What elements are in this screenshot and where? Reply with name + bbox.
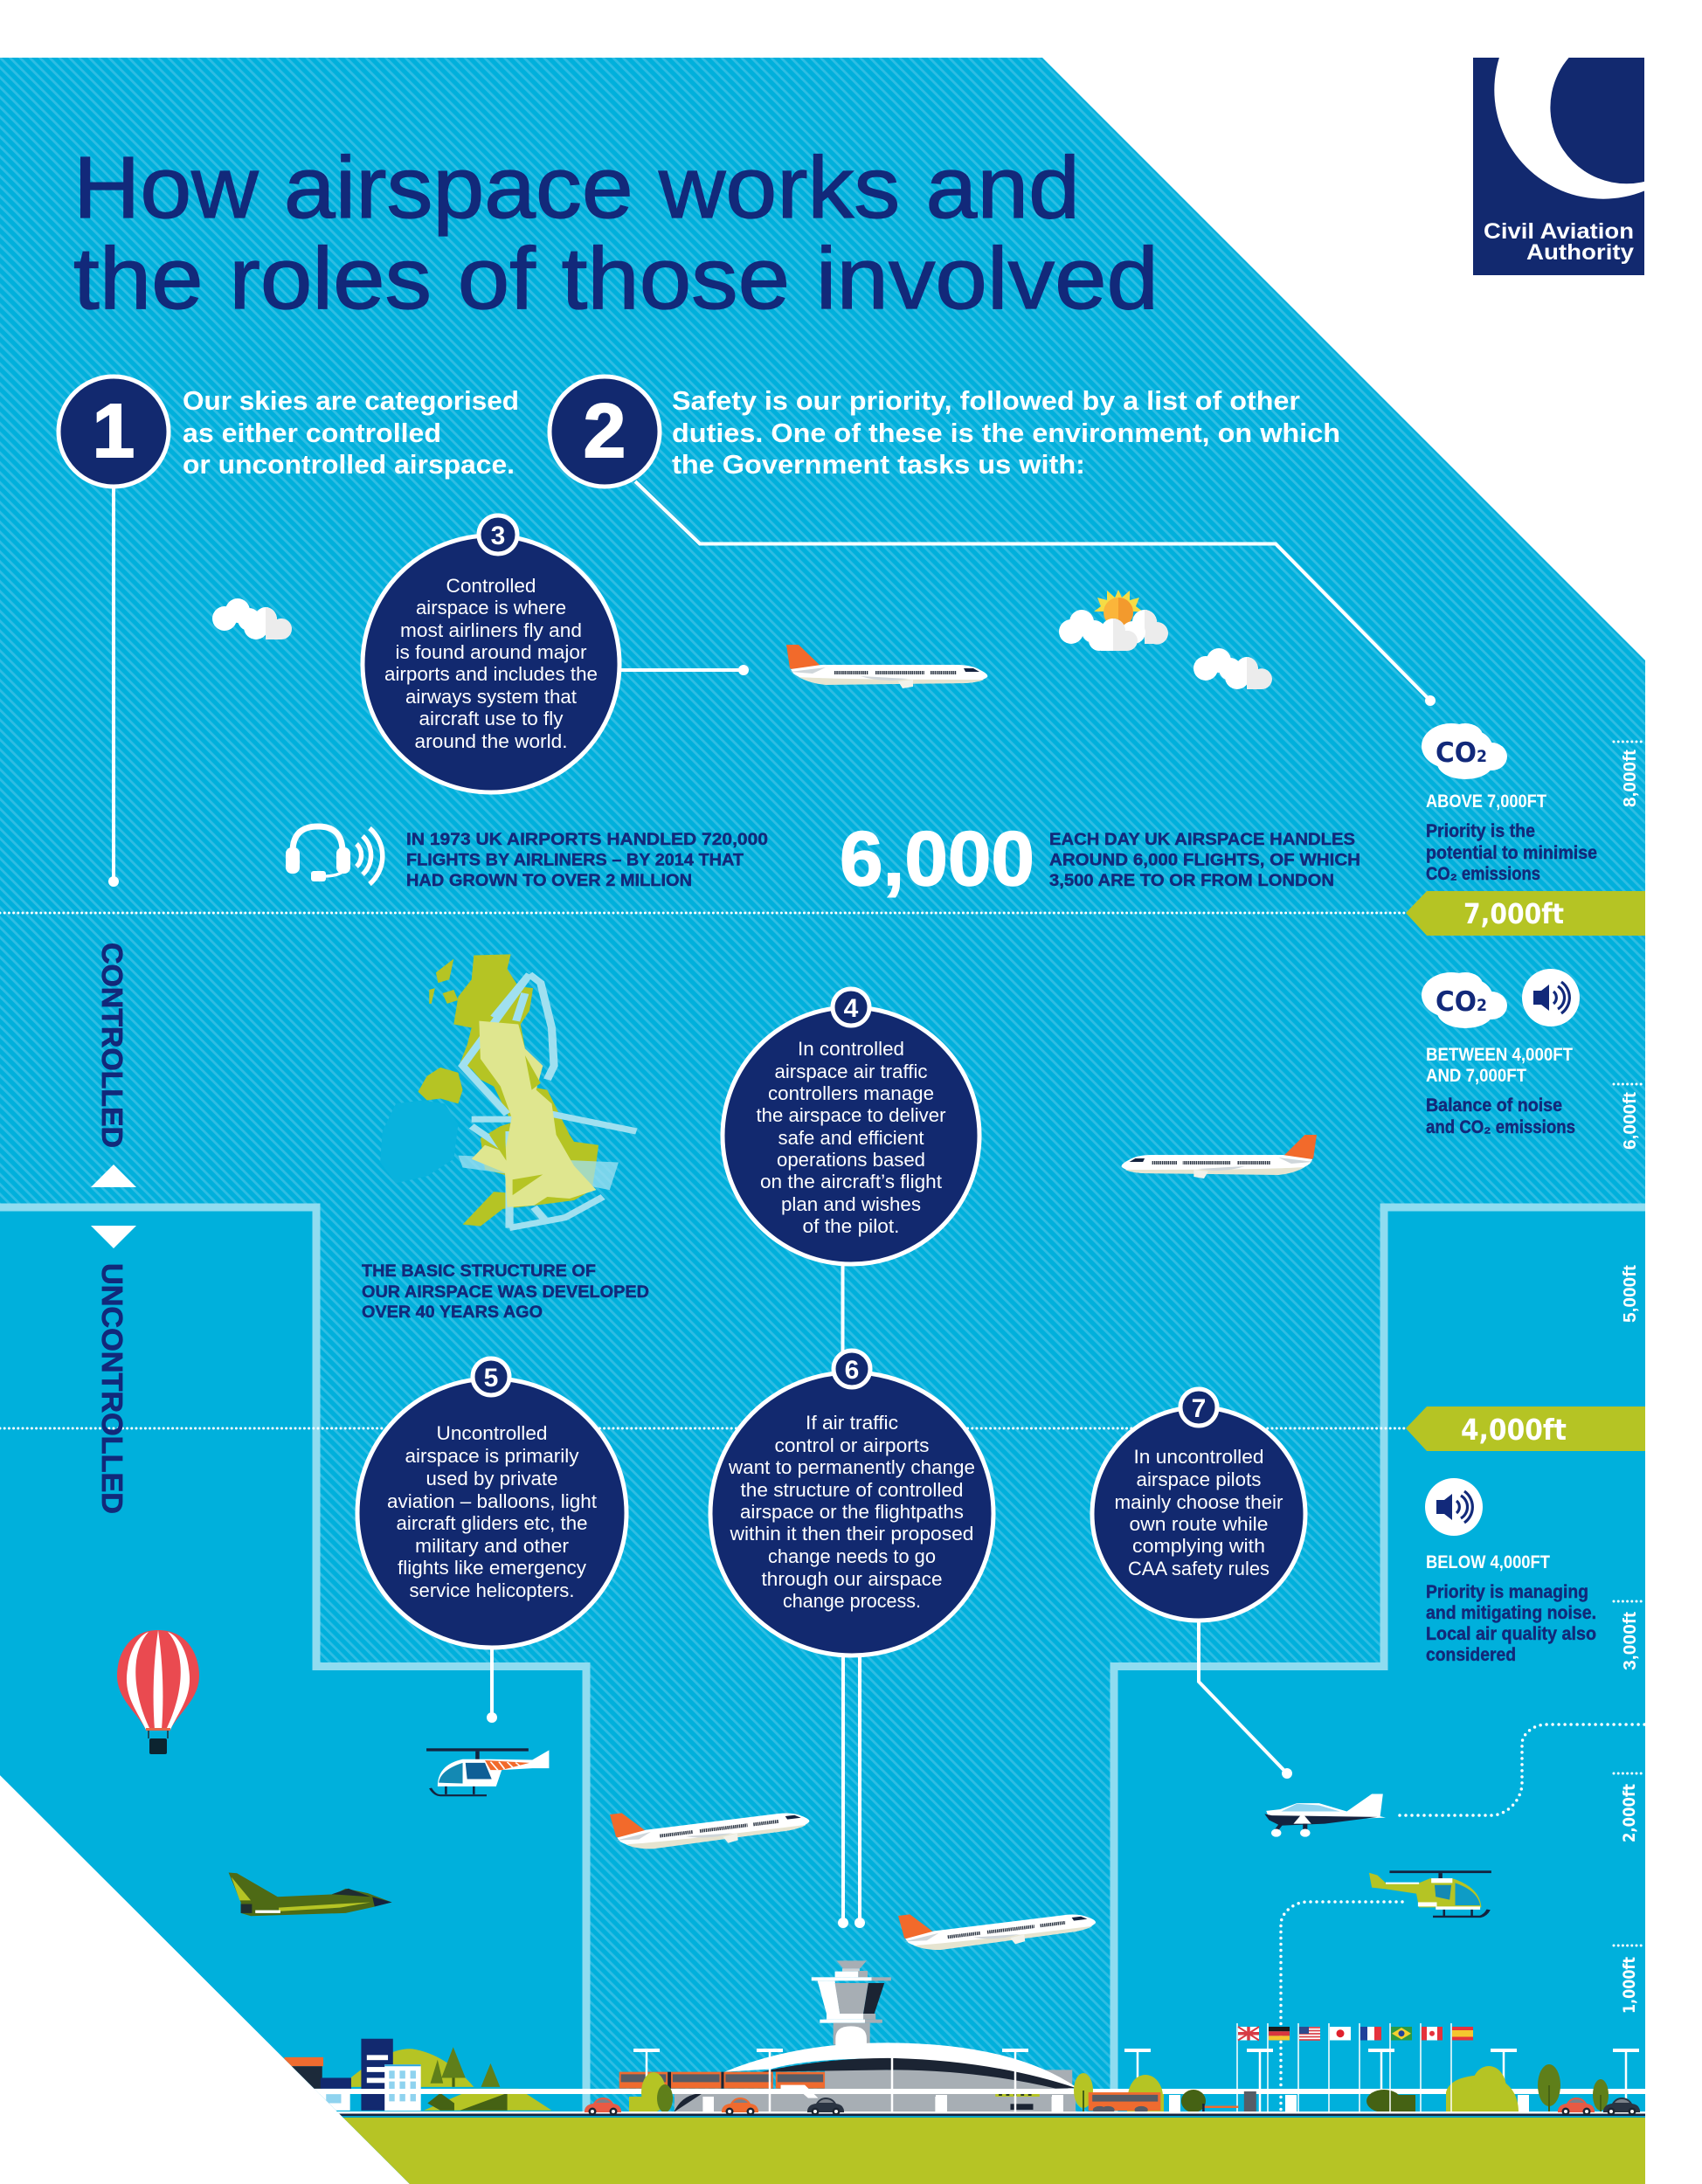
circle 7: pilots in uncontrolled airspace [1092, 1389, 1305, 1621]
altitude marker: 4,000ft [1406, 1406, 1645, 1451]
text: between 4,000ft and 7,000ft: and CO₂ emissions [1426, 1117, 1575, 1137]
connector: circle 4 to circle 6 [841, 1265, 844, 1354]
scene: flags [1237, 2023, 1473, 2112]
circle 6: airspace change process: control or airports [774, 1434, 930, 1456]
circle 7: pilots in uncontrolled airspace: complying with [1132, 1535, 1265, 1557]
circle 5: uncontrolled airspace: military and other [415, 1535, 569, 1557]
text: basic structure of airspace: OVER 40 YEARS AGO [362, 1303, 543, 1322]
airliner climbing, right [898, 1892, 1097, 1958]
text: above 7,000ft: CO₂ emissions [1426, 864, 1540, 884]
connector: circle 2 to CO2 priorities [635, 481, 1436, 706]
circle 3: controlled airspace: most airliners fly and [400, 619, 582, 641]
circle 3: controlled airspace [363, 515, 619, 792]
icon: CO2 cloud above 7,000ft: 2 [1477, 747, 1487, 766]
controlled label: CONTROLLED [96, 943, 128, 1148]
circle 5: uncontrolled airspace: 5 [484, 1364, 498, 1393]
circle 4: air traffic controllers: on the aircraft’s flight [760, 1171, 942, 1192]
circle 5: uncontrolled airspace: aviation – balloons, light [387, 1490, 597, 1512]
icon: CO2 cloud between altitudes [1422, 972, 1507, 1028]
scene: cars [585, 2098, 1640, 2116]
text: below 4,000ft: BELOW 4,000FT [1426, 1552, 1550, 1572]
step 1 text: Our skies are categorised [183, 385, 519, 416]
text: below 4,000ft: and mitigating noise. [1426, 1603, 1596, 1623]
scene: airport tower [812, 1960, 891, 2046]
altitude scale labels: 8,000ft [1621, 750, 1640, 807]
circle 5: uncontrolled airspace: service helicopters. [409, 1579, 575, 1601]
icon: speaker between altitudes [1522, 969, 1580, 1026]
circle 5: uncontrolled airspace: flights like emergency [398, 1557, 586, 1579]
text: basic structure of airspace: THE BASIC STRUCTURE OF [362, 1261, 596, 1281]
step 1 text [183, 385, 519, 480]
scene: trees and bushes [629, 2064, 1609, 2118]
altitude scale labels: 1,000ft [1620, 1957, 1639, 2014]
altitude scale labels: 2,000ft [1620, 1784, 1639, 1842]
stat: daily flights [1049, 830, 1360, 890]
text: between 4,000ft and 7,000ft: Balance of noise [1426, 1095, 1562, 1116]
circle 6: airspace change process: within it then their proposed [729, 1523, 973, 1545]
step 2 text: the Government tasks us with: [672, 449, 1085, 480]
altitude scale labels [1620, 750, 1640, 2014]
stat: daily flights: EACH DAY UK AIRSPACE HANDLES [1049, 830, 1355, 849]
scene: airport terminal and train [619, 2042, 1077, 2111]
airliner, cruising right [786, 645, 987, 688]
big number 6,000: 6,000 [840, 815, 1034, 902]
circle 6: airspace change process: want to permanently change [728, 1456, 975, 1478]
circle 6: airspace change process: If air traffic [806, 1412, 898, 1434]
stat: daily flights: 3,500 ARE TO OR FROM LONDON [1049, 871, 1334, 890]
icon: CO2 cloud above 7,000ft: CO [1436, 737, 1477, 769]
title [73, 139, 1159, 328]
circle 4: air traffic controllers: of the pilot. [802, 1215, 900, 1237]
text: between 4,000ft and 7,000ft [1426, 1045, 1575, 1137]
circle 3: controlled airspace: around the world. [414, 730, 568, 752]
circle 4: air traffic controllers: controllers manage [768, 1082, 934, 1104]
altitude marker: 7,000ft: 7,000ft [1463, 897, 1564, 930]
circle 3: controlled airspace: is found around major [395, 641, 587, 663]
circle 4: air traffic controllers: safe and efficient [778, 1127, 924, 1149]
step 2 text: Safety is our priority, followed by a list of other [672, 385, 1300, 416]
circle 6: airspace change process: airspace or the flightpaths [740, 1501, 964, 1523]
circle 5: uncontrolled airspace: airspace is primarily [405, 1445, 578, 1467]
stat: airport flights 1973 to 2014: HAD GROWN TO OVER 2 MILLION [406, 871, 692, 890]
circle 4: air traffic controllers [723, 989, 979, 1264]
title: How airspace works and [73, 139, 1080, 237]
light aircraft [1264, 1794, 1386, 1837]
stat: daily flights: AROUND 6,000 FLIGHTS, OF WHICH [1049, 851, 1360, 870]
circle 6: airspace change process: through our airspace [762, 1568, 942, 1590]
text: above 7,000ft [1426, 791, 1597, 884]
scene: bus and barrier [1089, 2091, 1256, 2113]
title: the roles of those involved [73, 230, 1159, 328]
stat: airport flights 1973 to 2014: IN 1973 UK AIRPORTS HANDLED 720,000 [406, 830, 768, 849]
scene: town at left [284, 2039, 552, 2111]
circle 7: pilots in uncontrolled airspace: 7 [1192, 1394, 1206, 1423]
arrow: down to uncontrolled [91, 1226, 136, 1248]
circle 3: controlled airspace: 3 [491, 522, 505, 550]
ground [332, 2111, 1645, 2184]
altitude scale labels: 5,000ft [1621, 1265, 1640, 1323]
connector: circle 6 to airliners [838, 1657, 865, 1928]
circle 6: airspace change process: change needs to go [768, 1545, 936, 1567]
circle 4: air traffic controllers: the airspace to deliver [757, 1104, 945, 1126]
helicopter: green [1369, 1870, 1491, 1917]
icon: headset [286, 826, 383, 884]
circle 6: airspace change process: change process. [783, 1590, 921, 1612]
circle 5: uncontrolled airspace: Uncontrolled [437, 1422, 547, 1444]
connector: circle 7 to light aircraft [1199, 1622, 1292, 1779]
step 1 number circle [59, 377, 169, 487]
circle 6: airspace change process: 6 [845, 1356, 859, 1385]
stat: airport flights 1973 to 2014: FLIGHTS BY AIRLINERS – BY 2014 THAT [406, 851, 744, 870]
text: between 4,000ft and 7,000ft: AND 7,000FT [1426, 1066, 1526, 1086]
connector: circle 3 to airliner [620, 665, 749, 675]
step 2 text [672, 385, 1340, 480]
dotted altitude lines [0, 742, 1645, 1946]
airliner, facing left [1122, 1135, 1317, 1178]
map: UK airways structure [380, 954, 636, 1228]
helicopter: emergency service [426, 1748, 549, 1795]
circle 3: controlled airspace: aircraft use to fly [419, 708, 563, 729]
text: below 4,000ft: Priority is managing [1426, 1582, 1588, 1602]
airliner climbing, left [610, 1790, 811, 1857]
connector: circle 5 to helicopter [487, 1649, 497, 1723]
uncontrolled label: UNCONTROLLED [96, 1263, 128, 1514]
altitude scale labels: 3,000ft [1621, 1612, 1640, 1670]
circle 6: airspace change process: the structure of controlled [741, 1479, 963, 1501]
step 2 number circle [550, 377, 660, 487]
circle 7: pilots in uncontrolled airspace: CAA safety rules [1128, 1558, 1270, 1579]
circle 3: controlled airspace: airports and includes the [384, 663, 598, 685]
text: below 4,000ft [1426, 1552, 1596, 1665]
circle 4: air traffic controllers: 4 [844, 994, 859, 1023]
flight trail: helicopter [1281, 1902, 1402, 2112]
step 2 number circle: 2 [584, 389, 626, 473]
logo: Civil Aviation Authority [1473, 58, 1644, 275]
logo: Civil Aviation Authority: Authority [1526, 240, 1634, 265]
circle 3: controlled airspace: Controlled [446, 575, 536, 597]
text: above 7,000ft: potential to minimise [1426, 843, 1597, 863]
connector: circle 1 to controlled label [108, 485, 119, 887]
step 1 text: as either controlled [183, 418, 441, 448]
text: basic structure of airspace [362, 1261, 649, 1322]
circle 5: uncontrolled airspace: used by private [426, 1468, 557, 1489]
text: below 4,000ft: considered [1426, 1645, 1516, 1665]
circle 4: air traffic controllers: airspace air traffic [774, 1061, 928, 1082]
text: basic structure of airspace: OUR AIRSPACE WAS DEVELOPED [362, 1282, 649, 1302]
text: between 4,000ft and 7,000ft: BETWEEN 4,000FT [1426, 1045, 1573, 1065]
circle 4: air traffic controllers: operations based [777, 1149, 925, 1171]
circle 6: airspace change process [710, 1351, 993, 1655]
circle 4: air traffic controllers: plan and wishes [781, 1193, 921, 1215]
text: above 7,000ft: Priority is the [1426, 821, 1535, 841]
circle 7: pilots in uncontrolled airspace: airspace pilots [1136, 1469, 1262, 1490]
circle 3: controlled airspace: airways system that [405, 686, 577, 708]
text: below 4,000ft: Local air quality also [1426, 1624, 1596, 1644]
altitude marker: 4,000ft: 4,000ft [1461, 1413, 1567, 1447]
circle 3: controlled airspace: airspace is where [416, 597, 566, 619]
circle 7: pilots in uncontrolled airspace: own route while [1129, 1513, 1269, 1535]
logo: Civil Aviation Authority: Civil Aviation [1484, 219, 1634, 244]
altitude marker: 7,000ft [1406, 891, 1645, 936]
fighter jet [229, 1872, 392, 1916]
circle 7: pilots in uncontrolled airspace: In uncontrolled [1134, 1446, 1263, 1468]
circle 4: air traffic controllers: In controlled [798, 1038, 904, 1060]
circle 5: uncontrolled airspace [357, 1358, 626, 1648]
flight trail: light aircraft [1400, 1724, 1645, 1815]
step 2 text: duties. One of these is the environment, on which [672, 418, 1340, 448]
circle 5: uncontrolled airspace: aircraft gliders etc, the [397, 1512, 587, 1534]
step 1 number circle: 1 [93, 389, 135, 473]
step 1 text: or uncontrolled airspace. [183, 449, 515, 480]
cloud left [212, 598, 292, 639]
cloud with sun [1059, 590, 1168, 651]
cloud right [1193, 648, 1272, 689]
icon: speaker below 4,000ft [1425, 1478, 1483, 1536]
hot air balloon [117, 1630, 199, 1754]
icon: CO2 cloud above 7,000ft [1422, 723, 1507, 779]
icon: CO2 cloud between altitudes: 2 [1477, 996, 1487, 1015]
text: above 7,000ft: ABOVE 7,000FT [1426, 791, 1546, 812]
altitude scale labels: 6,000ft [1621, 1092, 1640, 1150]
circle 7: pilots in uncontrolled airspace: mainly choose their [1115, 1491, 1283, 1513]
stat: airport flights 1973 to 2014 [406, 830, 768, 890]
scene: elevated deck, pillars and lamps [312, 2050, 1645, 2112]
icon: CO2 cloud between altitudes: CO [1436, 986, 1477, 1018]
arrow: up to controlled [91, 1165, 136, 1187]
